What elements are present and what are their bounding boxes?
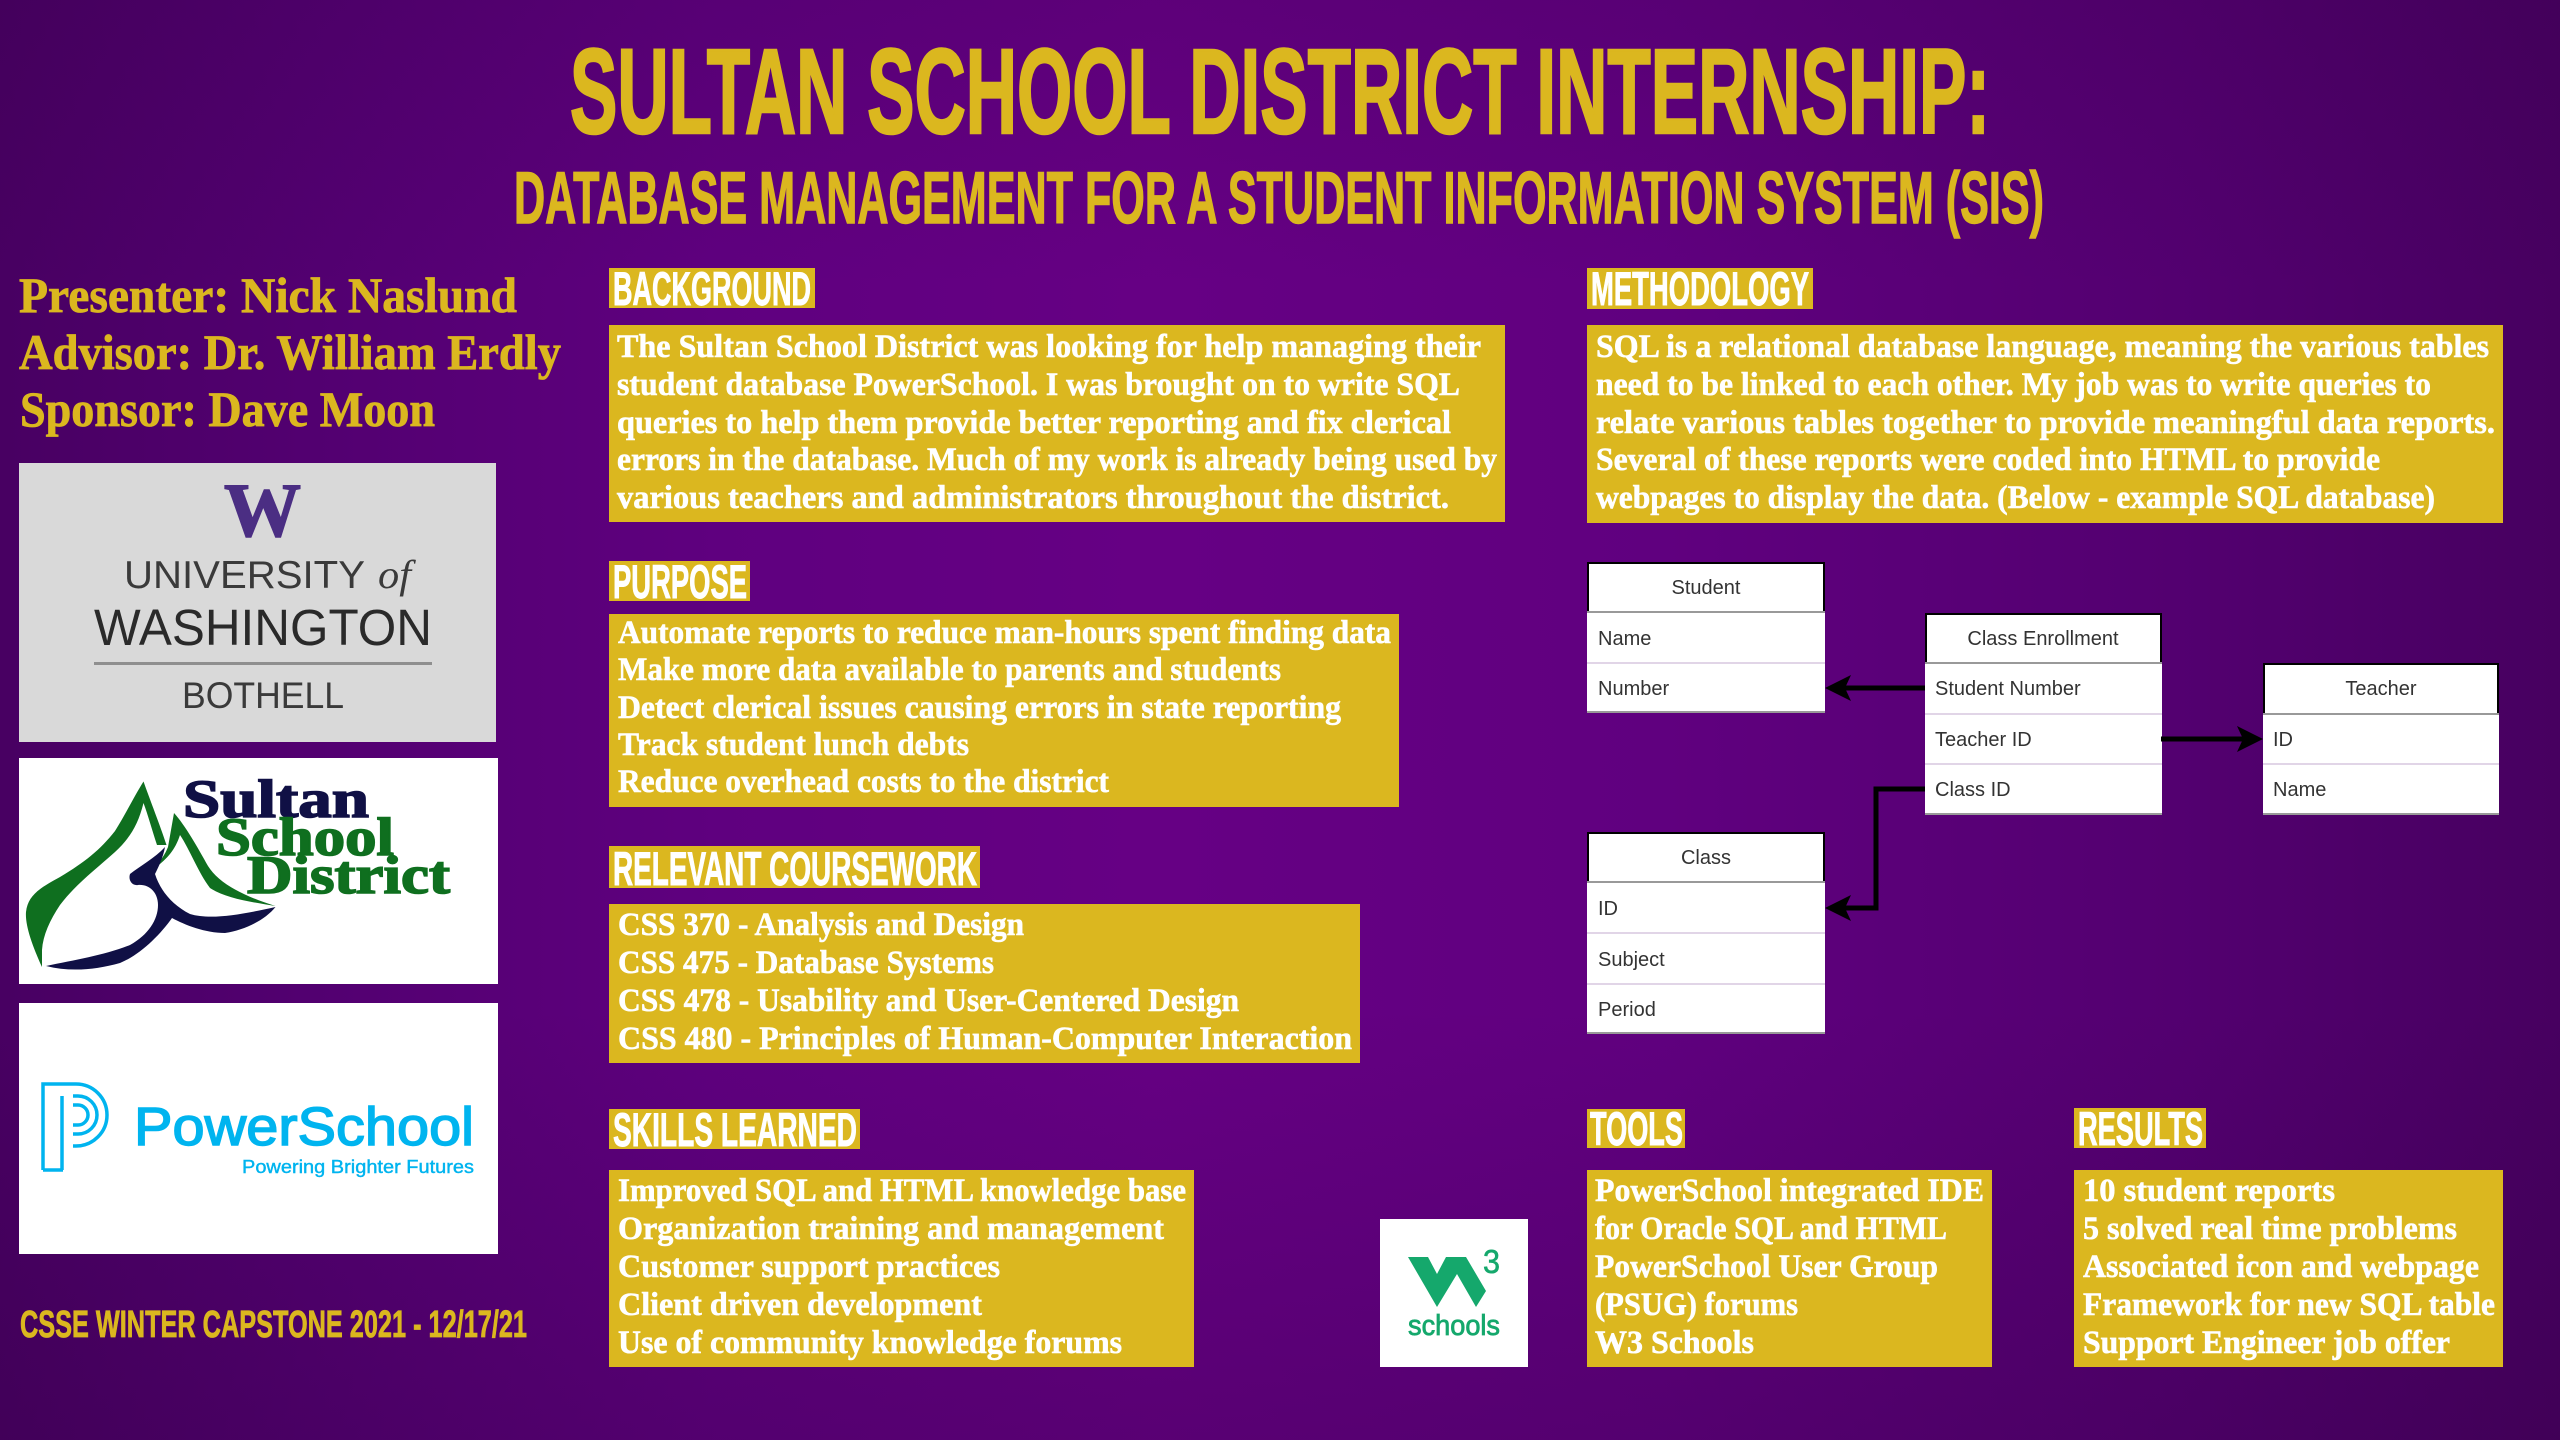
panel: skills learned: [609, 1103, 1194, 1367]
text block: background: [609, 325, 1505, 522]
logo: PowerSchool: PowerSchool: [134, 1097, 474, 1157]
table: Student: Name: [1598, 628, 1651, 650]
heading: skills learned: [609, 1103, 860, 1156]
text block: skills learned: Use of community knowledge forums: [618, 1325, 1122, 1361]
panel: background: [609, 262, 1505, 522]
table: Class: [1587, 832, 1825, 1034]
text block: results: 10 student reports: [2083, 1173, 2335, 1209]
text block: results: Support Engineer job offer: [2083, 1325, 2450, 1361]
chart: example SQL database diagram: [1587, 562, 2499, 1034]
logo: University of Washington Bothell: BOTHELL: [182, 675, 344, 716]
text block: purpose: Automate reports to reduce man-hours spent finding data: [618, 615, 1391, 651]
text block: tools: PowerSchool integrated IDE: [1595, 1173, 1984, 1209]
text block: background: various teachers and administrators throughout the district.: [617, 480, 1449, 516]
logo: Sultan School District: District: [247, 845, 450, 905]
table: Class Enrollment: Teacher ID: [1935, 729, 2032, 751]
logo: W3Schools: schools: [1408, 1310, 1500, 1342]
text block: results: Framework for new SQL table: [2083, 1287, 2495, 1323]
logo: PowerSchool: [19, 1003, 498, 1254]
text block: relevant coursework: [609, 904, 1360, 1063]
text block: methodology: SQL is a relational database language, meaning the various tables: [1596, 329, 2489, 365]
logo: University of Washington Bothell: WASHINGTON: [94, 599, 432, 656]
heading: background: [609, 262, 815, 315]
panel: methodology: [1587, 262, 2503, 523]
panel: purpose: [609, 555, 1399, 807]
table: Teacher: [2263, 663, 2499, 815]
text block: results: [2074, 1170, 2503, 1367]
table: Student: [1587, 562, 1825, 713]
text block: skills learned: Organization training and management: [618, 1211, 1164, 1247]
heading: methodology: [1587, 262, 1813, 315]
logo: Sultan School District: Sultan: [183, 769, 369, 829]
table: Class: Class: [1681, 847, 1731, 869]
text block: methodology: webpages to display the data. (Below - example SQL database): [1596, 480, 2435, 516]
heading: methodology: METHODOLOGY: [1591, 262, 1809, 315]
text block: skills learned: [609, 1170, 1194, 1367]
table: Class Enrollment: Class Enrollment: [1967, 628, 2119, 650]
text block: background: queries to help them provide better reporting and fix clerical: [617, 405, 1451, 441]
heading: background: BACKGROUND: [613, 262, 811, 315]
text block: methodology: [1587, 325, 2503, 523]
heading: purpose: [609, 555, 750, 608]
text block: relevant coursework: CSS 370 - Analysis and Design: [618, 907, 1024, 943]
text block: purpose: Track student lunch debts: [618, 727, 969, 763]
text block: skills learned: Client driven development: [618, 1287, 982, 1323]
text block: relevant coursework: CSS 475 - Database Systems: [618, 945, 994, 981]
text block: background: student database PowerSchool. I was brought on to write SQL: [617, 367, 1460, 403]
heading: tools: [1587, 1102, 1685, 1155]
text block: methodology: Several of these reports were coded into HTML to provide: [1596, 442, 2380, 478]
text block: tools: W3 Schools: [1595, 1325, 1754, 1361]
text block: purpose: Reduce overhead costs to the district: [618, 764, 1109, 800]
text block: relevant coursework: CSS 478 - Usability and User-Centered Design: [618, 983, 1239, 1019]
table: Class Enrollment: Student Number: [1935, 678, 2081, 700]
text block: purpose: Detect clerical issues causing errors in state reporting: [618, 690, 1341, 726]
panel: results: [2074, 1102, 2503, 1367]
text block: purpose: [609, 614, 1399, 807]
table: Teacher: Name: [2273, 779, 2326, 801]
logo: University of Washington Bothell: of: [378, 552, 416, 597]
table: Class Enrollment: [1925, 613, 2162, 815]
footer: event and date: CSSE WINTER CAPSTONE 2021 - 12/17/21: [20, 1304, 527, 1346]
table: Student: Number: [1598, 678, 1669, 700]
text block: relevant coursework: CSS 480 - Principles of Human-Computer Interaction: [618, 1021, 1352, 1057]
logo: Sultan School District: [19, 758, 498, 984]
table: Teacher: Teacher: [2345, 678, 2417, 700]
heading: skills learned: SKILLS LEARNED: [613, 1103, 857, 1156]
text block: project people: Presenter: Nick Naslund: [19, 267, 517, 323]
text block: methodology: relate various tables together to provide meaningful data reports.: [1596, 405, 2495, 441]
table: Class: Subject: [1598, 949, 1665, 971]
arrow: Student Number to Student: [1825, 675, 1925, 701]
text block: methodology: need to be linked to each other. My job was to write queries to: [1596, 367, 2431, 403]
heading: relevant coursework: RELEVANT COURSEWORK: [613, 842, 977, 895]
table: Class Enrollment: Class ID: [1935, 779, 2011, 801]
heading: tools: TOOLS: [1590, 1102, 1683, 1155]
table: Student: Student: [1672, 577, 1741, 599]
text block: project people: Sponsor: Dave Moon: [20, 381, 435, 437]
text block: project people: Advisor: Dr. William Erdly: [19, 324, 561, 380]
table: Teacher: ID: [2273, 729, 2293, 751]
text block: results: 5 solved real time problems: [2083, 1211, 2457, 1247]
text block: tools: for Oracle SQL and HTML: [1595, 1211, 1947, 1247]
text block: purpose: Make more data available to parents and students: [618, 652, 1281, 688]
heading: purpose: PURPOSE: [613, 555, 747, 608]
panel: tools: [1587, 1102, 1992, 1367]
text block: results: Associated icon and webpage: [2083, 1249, 2479, 1285]
table: Class: ID: [1598, 898, 1618, 920]
text block: background: The Sultan School District was looking for help managing their: [617, 329, 1481, 365]
text block: tools: (PSUG) forums: [1595, 1287, 1798, 1323]
logo: University of Washington Bothell: [19, 463, 496, 742]
logo: W3Schools: [1380, 1219, 1528, 1367]
arrow: Class ID to Class: [1825, 789, 1925, 921]
text block: project people: [19, 267, 561, 437]
text block: skills learned: Improved SQL and HTML knowledge base: [618, 1173, 1186, 1209]
text block: background: errors in the database. Much of my work is already being used by: [617, 442, 1497, 478]
text block: tools: PowerSchool User Group: [1595, 1249, 1938, 1285]
text block: tools: [1587, 1170, 1992, 1367]
heading: results: [2074, 1102, 2206, 1155]
logo: University of Washington Bothell: UNIVERSITY: [124, 554, 365, 597]
logo: Sultan School District: School: [216, 807, 394, 867]
text block: skills learned: Customer support practices: [618, 1249, 1000, 1285]
heading: relevant coursework: [609, 842, 980, 895]
panel: relevant coursework: [609, 842, 1360, 1063]
logo: PowerSchool: Powering Brighter Futures: [242, 1157, 474, 1177]
table: Class: Period: [1598, 999, 1656, 1021]
arrow: Teacher ID to Teacher: [2161, 726, 2263, 752]
heading: results: RESULTS: [2078, 1102, 2203, 1155]
logo: University of Washington Bothell: W: [224, 469, 301, 553]
logo: W3Schools: 3: [1483, 1243, 1500, 1280]
